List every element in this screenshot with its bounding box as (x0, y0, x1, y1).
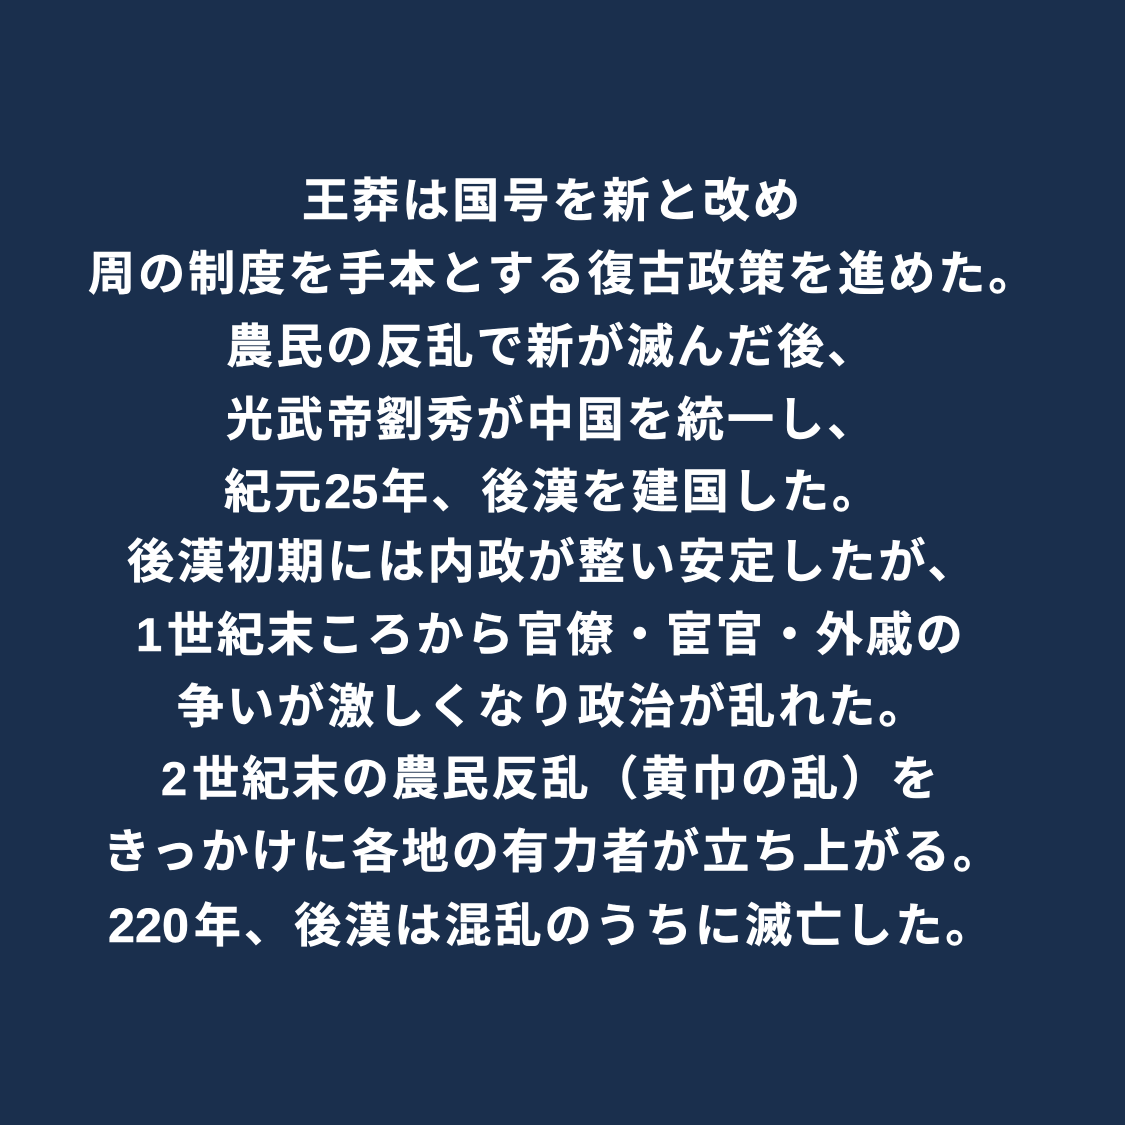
line 9: 2世紀末の農民反乱（黄巾の乱）を (161, 752, 941, 805)
line 10: きっかけに各地の有力者が立ち上がる。 (103, 825, 1003, 878)
line 4: 光武帝劉秀が中国を統一し、 (226, 393, 877, 446)
line 11: 220年、後漢は混乱のうちに滅亡した。 (108, 899, 996, 953)
line 5: 紀元25年、後漢を建国した。 (224, 465, 882, 519)
line 1: 王莽は国号を新と改め (302, 174, 803, 227)
line 6: 後漢初期には内政が整い安定したが、 (127, 535, 978, 588)
line 7: 1世紀末ころから官僚・宦官・外戚の (136, 608, 966, 661)
line 2: 周の制度を手本とする復古政策を進めた。 (88, 247, 1038, 300)
line 3: 農民の反乱で新が滅んだ後、 (226, 320, 877, 373)
line 8: 争いが激しくなり政治が乱れた。 (177, 680, 928, 733)
